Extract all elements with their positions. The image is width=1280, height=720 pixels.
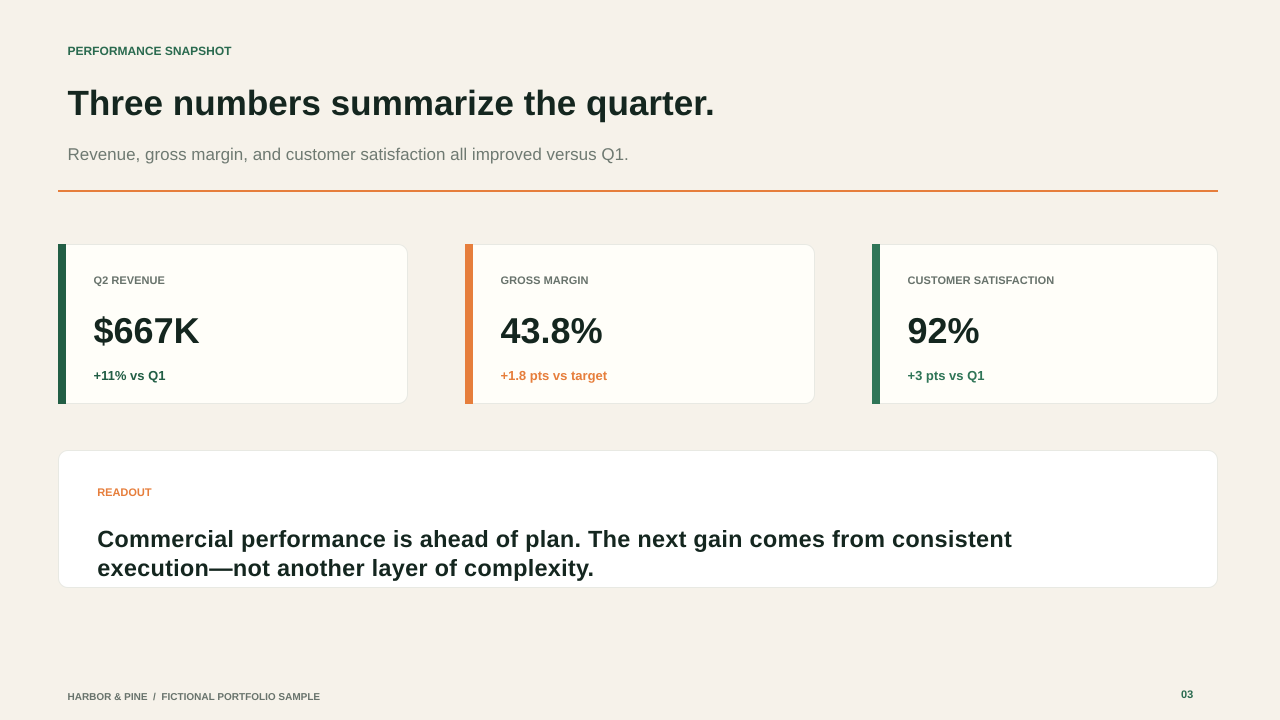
subtitle: Revenue, gross margin, and customer satisfaction all improved versus Q1. <box>68 145 629 164</box>
footer source: HARBOR & PINE / FICTIONAL PORTFOLIO SAMPLE <box>68 692 320 702</box>
readout label: READOUT <box>97 486 152 498</box>
panel: Q2 revenue: +11% vs Q1 <box>94 368 165 383</box>
header rule <box>58 190 1218 192</box>
panel: Q2 revenue: $667K <box>94 310 200 351</box>
readout statement: execution—not another layer of complexity. <box>97 554 594 580</box>
panel: customer satisfaction: CUSTOMER SATISFACTION <box>908 275 1054 287</box>
readout statement: Commercial performance is ahead of plan. The next gain comes from consistent <box>97 526 1012 552</box>
panel: Q2 revenue: Q2 REVENUE <box>94 275 165 287</box>
panel: gross margin: +1.8 pts vs target <box>500 368 607 383</box>
title: Three numbers summarize the quarter. <box>68 84 715 123</box>
readout statement <box>97 526 1012 581</box>
panel: gross margin <box>465 244 815 404</box>
eyebrow: PERFORMANCE SNAPSHOT <box>68 44 232 58</box>
panel: gross margin: 43.8% <box>500 310 603 351</box>
panel: customer satisfaction: +3 pts vs Q1 <box>908 368 984 383</box>
panel: readout <box>58 450 1218 588</box>
page number: 03 <box>1181 689 1193 701</box>
panel: customer satisfaction <box>872 244 1218 404</box>
panel: gross margin: GROSS MARGIN <box>500 275 588 287</box>
panel: Q2 revenue <box>58 244 408 404</box>
panel: customer satisfaction: 92% <box>908 310 980 351</box>
